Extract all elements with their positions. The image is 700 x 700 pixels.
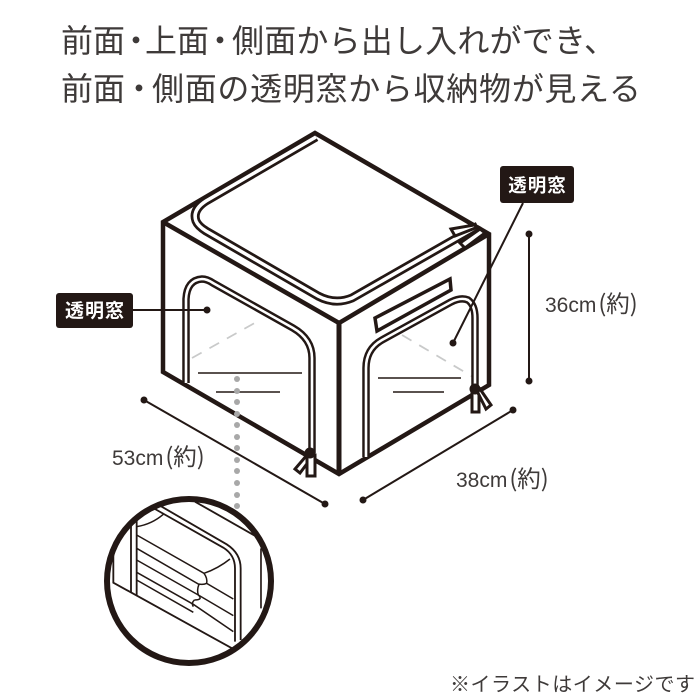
title: ・ <box>123 64 155 110</box>
left zipper tie <box>295 449 315 476</box>
right window zipper <box>366 299 475 457</box>
lid zipper <box>195 137 478 301</box>
title: 前面 <box>61 16 125 62</box>
depth dimension: 38cm(約) <box>456 460 549 494</box>
side handle <box>375 279 451 331</box>
callout: left window: 透明窓 <box>65 296 125 323</box>
title: 側面から出し入れができ、 <box>232 16 616 62</box>
height dimension <box>526 230 638 384</box>
box outline <box>163 133 489 474</box>
title <box>61 16 642 110</box>
contents lines <box>198 373 461 392</box>
title: ・ <box>204 16 236 62</box>
dotted leader to zoom circle <box>234 376 240 509</box>
title: 側面の透明窓から収納物が見える <box>152 64 642 110</box>
dashed back edges <box>192 320 473 377</box>
right zipper tie <box>471 385 491 412</box>
footnote: ※イラストはイメージです <box>450 668 695 697</box>
depth dimension <box>360 406 549 504</box>
title: 前面 <box>61 64 125 110</box>
width dimension <box>112 396 328 508</box>
width dimension: 53cm(約) <box>112 438 205 472</box>
callout: right window <box>450 166 574 346</box>
callout: left window <box>56 293 210 328</box>
storage box illustration <box>163 133 491 476</box>
zipper pulls top <box>451 225 485 248</box>
height dimension: 36cm(約) <box>545 285 638 319</box>
title: ・ <box>120 16 152 62</box>
zoom circle: folded contents <box>107 499 271 663</box>
title: 上面 <box>145 16 209 62</box>
left window zipper <box>186 279 312 453</box>
callout: right window: 透明窓 <box>508 172 567 198</box>
